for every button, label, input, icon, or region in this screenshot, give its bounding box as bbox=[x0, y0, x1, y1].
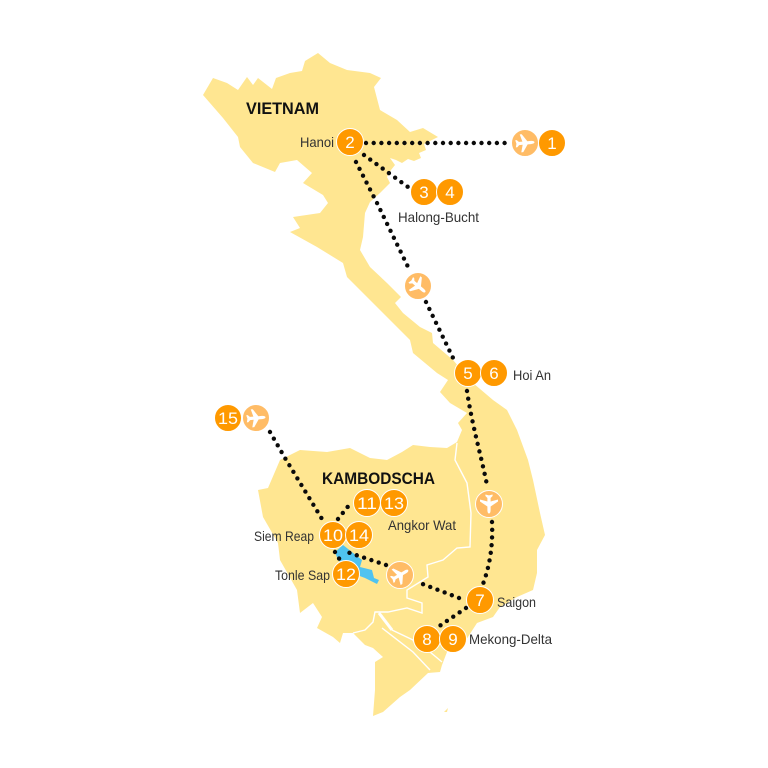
stop 5 bbox=[454, 360, 482, 386]
stop 6 bbox=[480, 360, 508, 386]
stop 7: 7 bbox=[475, 591, 485, 610]
stop 5: 5 bbox=[463, 364, 473, 383]
label: Halong-Bucht: Halong-Bucht bbox=[398, 209, 479, 225]
stop 6: 6 bbox=[489, 364, 499, 383]
heading: Kambodscha: KAMBODSCHA bbox=[322, 469, 435, 488]
heading: Vietnam: VIETNAM bbox=[246, 99, 319, 118]
stop 2 bbox=[336, 128, 364, 156]
Phu Quoc island bbox=[444, 708, 448, 712]
label: Tonle Sap: Tonle Sap bbox=[275, 567, 330, 583]
stop 3: 3 bbox=[419, 183, 429, 202]
stop 1 bbox=[538, 130, 566, 156]
stop 1: 1 bbox=[547, 134, 557, 153]
stop 10: 10 bbox=[323, 526, 343, 545]
icon: plane Saigon to Siem Reap bbox=[386, 562, 414, 588]
Tonle Sap lake bbox=[335, 545, 379, 584]
stop 12 bbox=[332, 560, 360, 588]
stop 13 bbox=[380, 490, 408, 516]
stop 9: 9 bbox=[448, 630, 458, 649]
stop 11 bbox=[354, 490, 380, 516]
stop 8: 8 bbox=[422, 630, 432, 649]
stop 14 bbox=[346, 522, 372, 548]
icon: plane Hanoi to Hoi An bbox=[404, 272, 432, 300]
icon: plane Hoi An to Saigon bbox=[476, 490, 502, 518]
stop 14: 14 bbox=[349, 526, 369, 545]
stop 8 bbox=[414, 626, 440, 652]
stop 12: 12 bbox=[336, 565, 356, 584]
label: Saigon: Saigon bbox=[497, 594, 536, 610]
map: Vietnam and Cambodia landmass bbox=[203, 53, 545, 716]
label: Mekong-Delta: Mekong-Delta bbox=[469, 631, 552, 647]
stop 13: 13 bbox=[384, 494, 404, 513]
stop 11: 11 bbox=[357, 494, 377, 513]
stop 9 bbox=[440, 626, 466, 652]
stop 15 bbox=[214, 404, 242, 432]
icon: plane to Vietnam bbox=[512, 130, 538, 156]
stop 2: 2 bbox=[345, 133, 355, 152]
dotted route bbox=[270, 143, 509, 627]
stop 3 bbox=[410, 178, 438, 206]
stop 10 bbox=[320, 522, 346, 548]
icon: plane departure bbox=[242, 404, 270, 432]
Vietnam-Cambodia border and Mekong arms bbox=[353, 443, 471, 670]
label: Siem Reap: Siem Reap bbox=[254, 528, 314, 544]
stop 4: 4 bbox=[445, 183, 455, 202]
stop 7 bbox=[466, 586, 494, 614]
label: Hoi An: Hoi An bbox=[513, 367, 551, 383]
label: Angkor Wat: Angkor Wat bbox=[388, 517, 456, 533]
label: Hanoi: Hanoi bbox=[300, 134, 334, 150]
stop 4 bbox=[436, 178, 464, 206]
stop 15: 15 bbox=[218, 409, 238, 428]
